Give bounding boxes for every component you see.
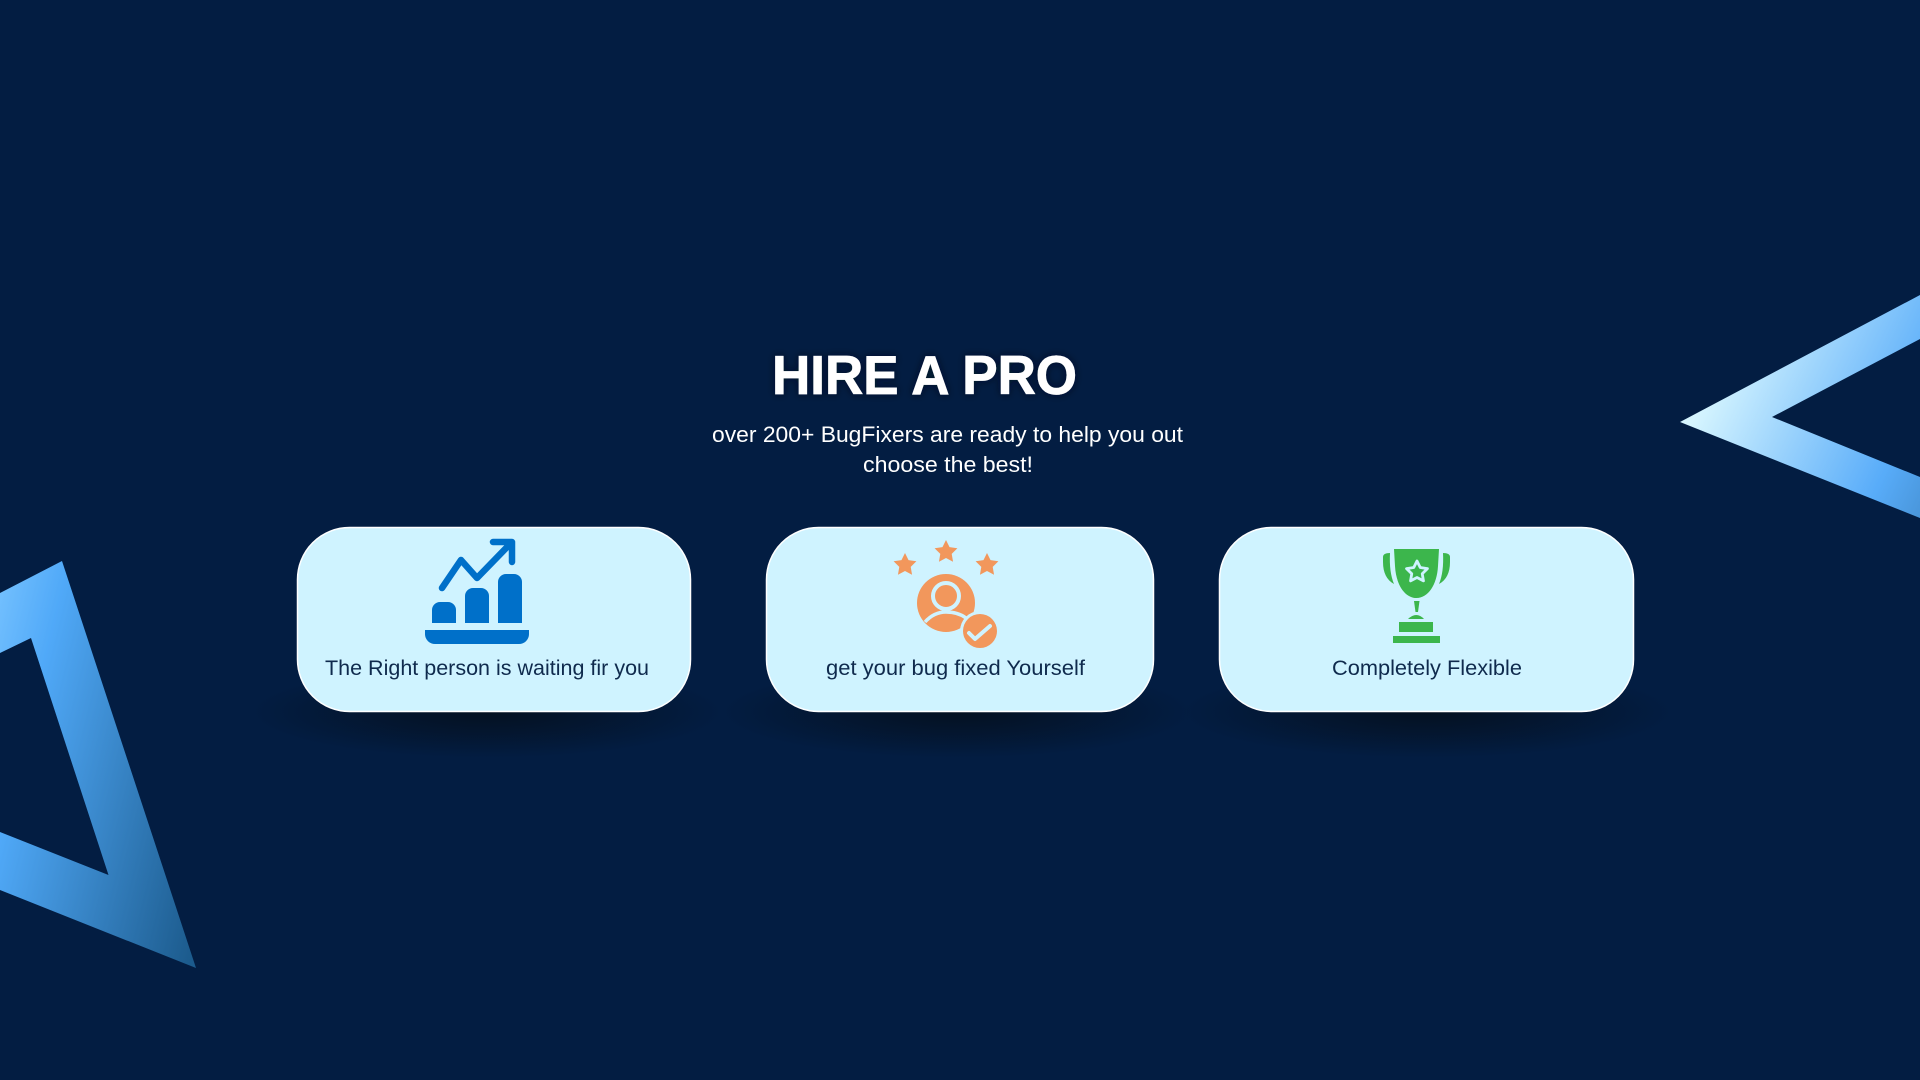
label: the right person: The Right person is waiting fir you <box>325 656 649 680</box>
icon: trophy <box>1383 549 1450 643</box>
icon: rising bar chart <box>425 542 529 644</box>
title: HIRE A PRO <box>772 344 1077 406</box>
label: fix your bug: get your bug fixed Yourself <box>826 656 1085 680</box>
decorative triangle: right <box>1680 295 1920 518</box>
panel: completely flexible <box>1182 528 1672 758</box>
icon: rated person with check <box>894 540 1000 651</box>
subtitle: choose the best! <box>863 452 1033 477</box>
panel: fix your bug <box>722 528 1192 758</box>
subtitle <box>712 422 1184 477</box>
panel: the right person <box>252 528 722 758</box>
subtitle: over 200+ BugFixers are ready to help you out <box>712 422 1184 447</box>
decorative triangle: left <box>0 561 196 968</box>
label: completely flexible: Completely Flexible <box>1332 656 1522 680</box>
